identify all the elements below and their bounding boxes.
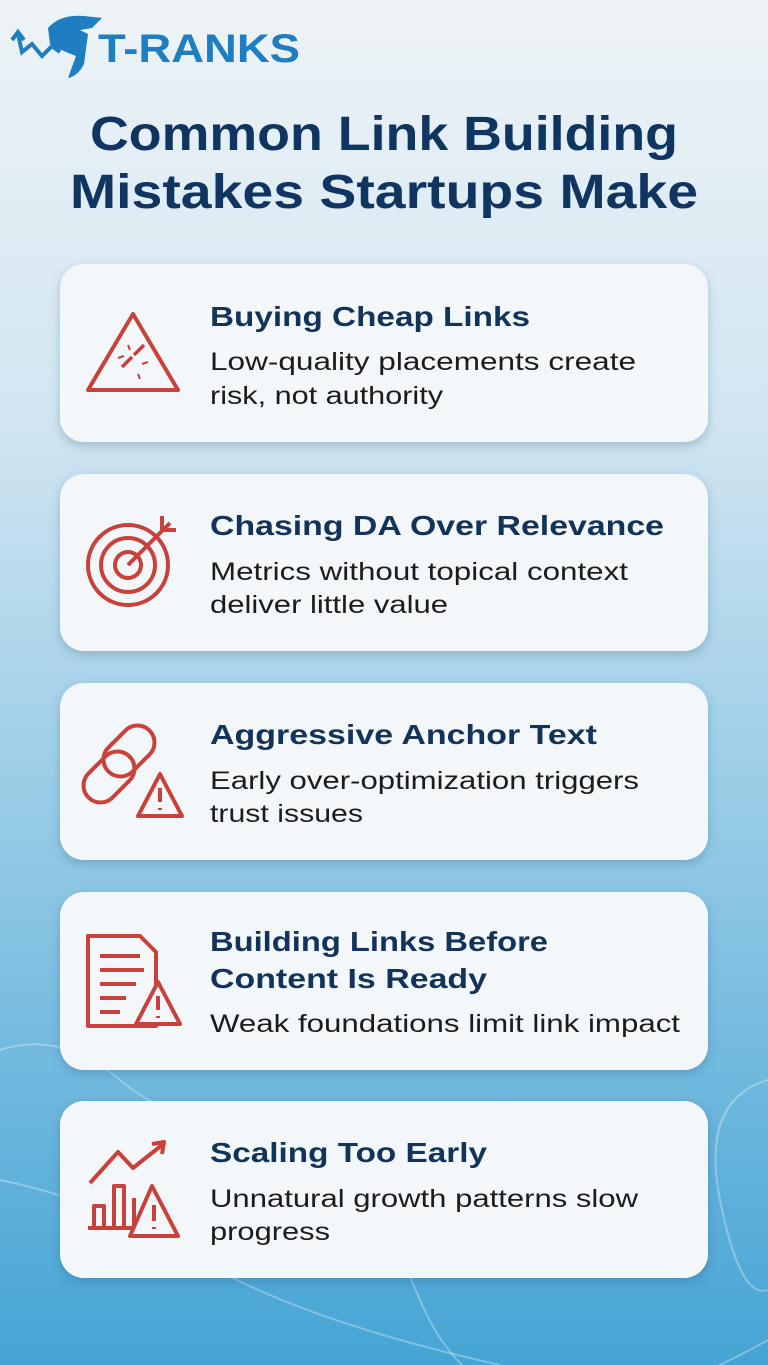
icon: growth chart warning bbox=[88, 1142, 178, 1236]
icon: document warning bbox=[88, 936, 180, 1026]
card: scaling too early bbox=[60, 1101, 708, 1278]
card: buying cheap links: Buying Cheap Links bbox=[210, 301, 530, 332]
card: scaling too early: progress bbox=[210, 1218, 330, 1246]
card: building before content bbox=[60, 892, 708, 1070]
card: aggressive anchor: Aggressive Anchor Text bbox=[210, 719, 597, 750]
card: aggressive anchor: Early over-optimization triggers bbox=[210, 767, 639, 795]
card: chasing DA: Metrics without topical context bbox=[210, 558, 628, 586]
card: scaling too early: Scaling Too Early bbox=[210, 1137, 488, 1168]
card: building before content: Content Is Ready bbox=[210, 963, 488, 994]
logo: T-RANKS bbox=[98, 27, 300, 71]
card: chasing DA bbox=[60, 474, 708, 651]
card: chasing DA: deliver little value bbox=[210, 591, 448, 619]
card: building before content: Weak foundations limit link impact bbox=[210, 1010, 680, 1038]
icon: link with warning bbox=[76, 718, 182, 816]
title: Common Link Building bbox=[90, 108, 678, 161]
icon: target bbox=[88, 516, 176, 605]
card: buying cheap links bbox=[60, 264, 708, 442]
card: aggressive anchor: trust issues bbox=[210, 800, 363, 828]
card: chasing DA: Chasing DA Over Relevance bbox=[210, 510, 664, 541]
title bbox=[70, 108, 698, 219]
card: buying cheap links: risk, not authority bbox=[210, 382, 444, 410]
card: building before content: Building Links Before bbox=[210, 926, 548, 957]
logo bbox=[12, 16, 300, 78]
card: scaling too early: Unnatural growth patterns slow bbox=[210, 1185, 639, 1213]
card: buying cheap links: Low-quality placements create bbox=[210, 348, 636, 376]
title: Mistakes Startups Make bbox=[70, 166, 698, 219]
icon: broken link warning bbox=[88, 314, 178, 390]
card: aggressive anchor bbox=[60, 683, 708, 860]
